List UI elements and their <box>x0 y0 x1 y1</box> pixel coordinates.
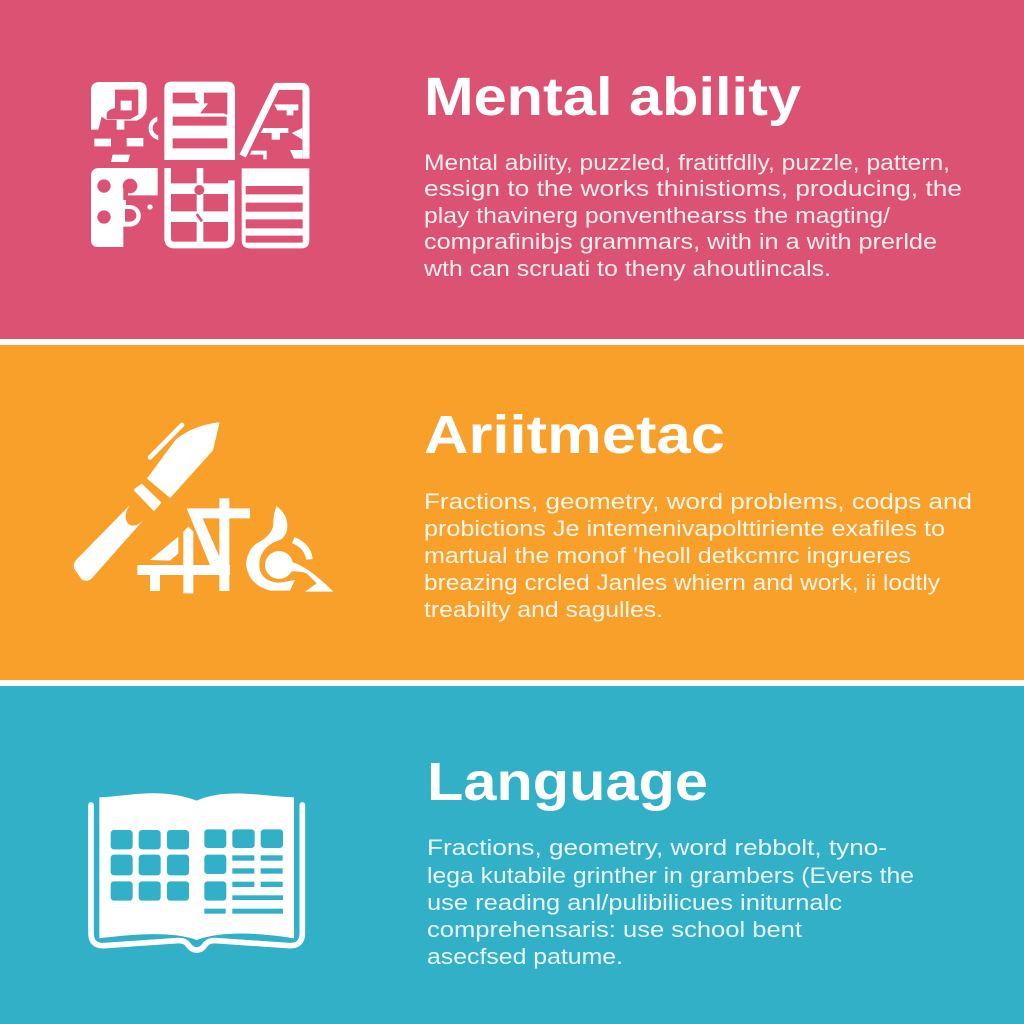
panel: language <box>0 686 1024 1024</box>
text block: arithmetic: Fractions, geometry, word problems, codps and <box>424 489 972 514</box>
text block: arithmetic: probictions Je intemenivapolttiriente exafiles to <box>424 516 945 541</box>
text block: mental ability: comprafinibjs grammars, with in a with prerlde <box>424 229 937 254</box>
text block: language: use reading anl/pulibilicues initurnalc <box>427 890 842 915</box>
icon: pen, geometry and flame <box>74 423 333 593</box>
text block: arithmetic: treabilty and sagulles. <box>424 597 663 622</box>
text block: arithmetic: breazing crcled Janles whiern and work, ii lodtly <box>424 570 940 595</box>
text block: mental ability <box>423 150 962 281</box>
icon: open book <box>91 793 302 950</box>
text block: language: comprehensaris: use school bent <box>427 917 802 942</box>
text block: mental ability: wth can scruati to theny ahoutlincals. <box>423 256 831 281</box>
panel: arithmetic <box>0 345 1024 680</box>
icon: puzzle grid <box>91 82 309 248</box>
text block: mental ability: essign to the works thinistioms, producing, the <box>424 176 962 201</box>
heading: language: Language <box>427 752 708 812</box>
text block: mental ability: play thavinerg ponventhearss the magting/ <box>424 203 891 228</box>
heading: arithmetic: Ariitmetac <box>424 405 725 465</box>
text block: arithmetic: martual the monof 'heoll detkcmrc ingrueres <box>424 543 911 568</box>
text block: language: asecfsed patume. <box>427 944 623 969</box>
text block: language: lega kutabile grinther in grambers (Evers the <box>427 863 914 888</box>
text block: language: Fractions, geometry, word rebbolt, tyno- <box>427 835 887 860</box>
panel: mental ability <box>0 0 1024 339</box>
text block: mental ability: Mental ability, puzzled, fratitfdlly, puzzle, pattern, <box>424 150 950 175</box>
text block: arithmetic <box>424 489 972 622</box>
heading: mental ability: Mental ability <box>424 67 801 127</box>
text block: language <box>427 835 914 969</box>
